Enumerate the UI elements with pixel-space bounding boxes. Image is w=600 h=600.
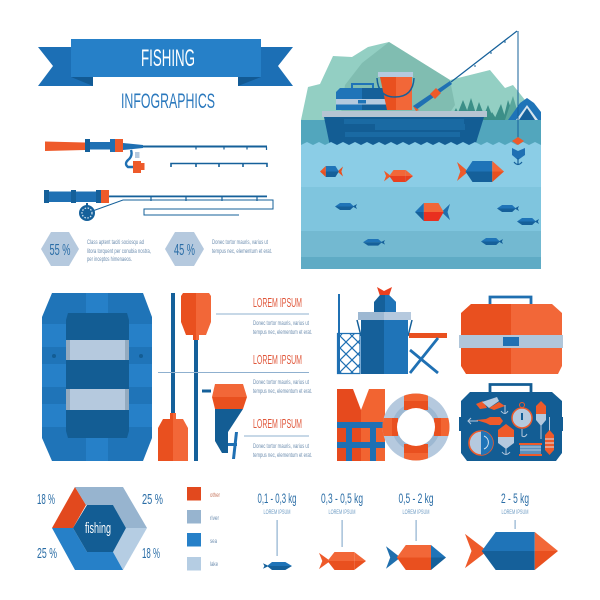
tent	[508, 98, 541, 120]
hexagon chart: fishing	[85, 520, 111, 537]
callout: lorem ipsum 2: Donec tortor mauris, varius ut	[253, 379, 309, 386]
legend	[187, 487, 221, 570]
lake horizon band	[301, 120, 541, 146]
open tackle box with gear	[459, 384, 563, 461]
weight class: 2 - 5 kg: LOREM IPSUM	[502, 510, 528, 516]
callout: lorem ipsum 2: LOREM IPSUM	[253, 352, 302, 367]
weight class: 0,1 - 0,3 kg: 0,1 - 0,3 kg	[258, 490, 296, 506]
text block: 45 percent description: tempus nec, elementum et erat.	[212, 248, 272, 255]
chart percentages: 25 %	[37, 546, 57, 562]
weight class: 0,3 - 0,5 kg	[319, 490, 366, 570]
gear: small fish	[468, 417, 503, 425]
callout: lorem ipsum 3: LOREM IPSUM	[253, 416, 302, 431]
life ring	[382, 394, 450, 460]
text block: 55 percent description	[87, 239, 151, 263]
bucket on deck	[377, 72, 414, 110]
chart percentages: 18 %	[142, 546, 160, 562]
spinning rod	[45, 139, 267, 173]
scene: boat on lake	[301, 31, 541, 269]
callout: lorem ipsum 2	[158, 352, 312, 395]
text block: 45 percent description	[212, 239, 272, 255]
weight class: 0,3 - 0,5 kg: LOREM IPSUM	[328, 510, 356, 516]
bait bucket with fish	[357, 287, 412, 374]
gear: floats	[536, 401, 554, 455]
weight class: 0,1 - 0,3 kg	[258, 490, 296, 570]
float and sinker	[512, 137, 525, 165]
life jacket	[337, 389, 385, 461]
legend: lake	[210, 561, 218, 568]
weight class: 0,3 - 0,5 kg: 0,3 - 0,5 kg	[321, 490, 363, 506]
banner: fishing title ribbon	[38, 39, 293, 86]
legend: river	[210, 515, 220, 522]
heading: infographics: INFOGRAPHICS	[121, 90, 215, 113]
fishing rod and line	[413, 31, 518, 139]
callout: lorem ipsum 2: tempus nec, elementum et erat.	[253, 388, 312, 395]
banner: fishing title ribbon: FISHING	[141, 45, 195, 72]
callout: lorem ipsum 1: tempus nec, elementum et erat.	[253, 329, 312, 336]
legend: other	[210, 492, 221, 499]
outboard motor	[202, 384, 247, 459]
tackle box closed	[459, 297, 563, 374]
fish group in lake	[320, 161, 539, 246]
gear: scale gauge	[512, 402, 532, 437]
stat badge: 55 percent: 55 %	[50, 242, 70, 259]
chart percentages: 18 %	[37, 492, 55, 508]
callout: lorem ipsum 3: tempus nec, elementum et erat.	[253, 452, 312, 459]
chart percentages	[37, 492, 163, 562]
weight class: 0,1 - 0,3 kg: LOREM IPSUM	[264, 510, 290, 516]
inflatable boat top view	[42, 293, 152, 461]
legend: sea	[210, 538, 217, 545]
fly rod	[44, 190, 273, 221]
mountains	[301, 42, 540, 120]
gear: compass	[469, 431, 493, 455]
text block: 55 percent description: per inceptos himenaeos.	[87, 256, 132, 263]
text block: 55 percent description: litora torquent per conubia nostra,	[87, 248, 151, 255]
stat badge: 45 percent: 45 %	[174, 242, 195, 259]
callout: lorem ipsum 1: LOREM IPSUM	[253, 295, 302, 310]
oar pointing up	[181, 293, 211, 461]
weight class: 2 - 5 kg: 2 - 5 kg	[501, 490, 529, 506]
tackle box on deck	[336, 84, 388, 110]
weight class: 0,5 - 2 kg	[386, 490, 446, 570]
hexagon chart	[52, 487, 147, 570]
weight class: 2 - 5 kg	[465, 490, 558, 570]
weight class: 0,5 - 2 kg: LOREM IPSUM	[402, 510, 430, 516]
callout: lorem ipsum 1: Donec tortor mauris, varius ut	[253, 320, 309, 327]
gear: sinker	[498, 424, 514, 455]
chart percentages: 25 %	[142, 492, 163, 508]
callout: lorem ipsum 3: Donec tortor mauris, varius ut	[253, 443, 309, 450]
text block: 45 percent description: Donec tortor mauris, varius ut	[212, 239, 268, 246]
callout: lorem ipsum 1	[216, 295, 312, 336]
weight class: 0,5 - 2 kg: 0,5 - 2 kg	[398, 490, 434, 506]
stat badge: 45 percent	[165, 232, 204, 266]
spinning rod length scale	[171, 164, 267, 167]
oar pointing down	[158, 293, 188, 461]
water layers	[301, 142, 541, 269]
folding stool	[409, 333, 447, 373]
boat hull	[322, 111, 487, 146]
gear: lure	[476, 397, 508, 414]
text block: 55 percent description: Class aptent taciti sociosqu ad	[87, 239, 144, 246]
gear: line spool	[519, 443, 542, 456]
tree line	[454, 96, 516, 120]
callout: lorem ipsum 3	[244, 416, 312, 459]
landing net	[336, 294, 361, 374]
stat badge: 55 percent	[41, 232, 79, 266]
